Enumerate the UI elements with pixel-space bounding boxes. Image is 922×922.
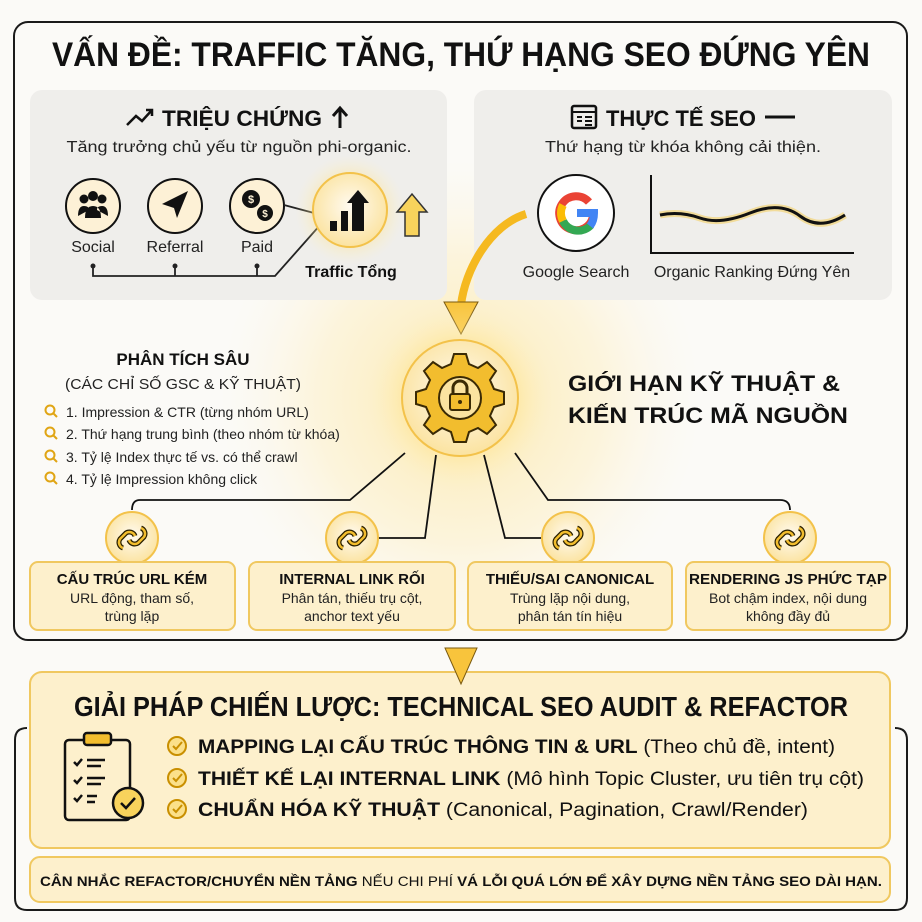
cause boxes: Bot chậm index, nội dung bbox=[709, 590, 867, 606]
icon: social bbox=[66, 179, 120, 233]
cause boxes: trùng lặp bbox=[105, 608, 159, 624]
cause boxes: Phân tán, thiếu trụ cột, bbox=[282, 590, 422, 606]
arrow: up bbox=[397, 194, 427, 236]
cause boxes: anchor text yếu bbox=[304, 608, 400, 624]
icon: paid: $ bbox=[248, 194, 254, 206]
cause icons bbox=[106, 512, 816, 564]
icon: paid: $ bbox=[262, 209, 268, 220]
cause boxes: CẤU TRÚC URL KÉM bbox=[57, 570, 207, 588]
arrow: down to solution bbox=[445, 648, 477, 684]
subtitle: Thứ hạng từ khóa không cải thiện. bbox=[545, 139, 821, 156]
heading: technical limit bbox=[568, 371, 848, 428]
cause boxes: phân tán tín hiệu bbox=[518, 608, 622, 624]
panel: symptoms: Traffic Tổng bbox=[305, 263, 397, 281]
icon: traffic total bbox=[295, 155, 405, 265]
list: solution items bbox=[168, 736, 864, 821]
callout: note: CÂN NHẮC REFACTOR/CHUYỂN NỀN TẢNG NẾU CHI PHÍ VÁ LỖI QUÁ LỚN ĐỂ XÂY DỰNG NỀN TẢNG SEO DÀI HẠN. bbox=[40, 872, 882, 889]
labels: Social bbox=[71, 239, 115, 256]
bottom frame bbox=[15, 728, 907, 910]
icon: paid bbox=[230, 179, 284, 233]
top frame bbox=[14, 22, 907, 640]
icon: clipboard bbox=[65, 733, 143, 820]
chart: flat ranking bbox=[651, 175, 854, 253]
icon: google bbox=[538, 175, 614, 251]
arrow: curved to center bbox=[444, 214, 526, 334]
cause boxes bbox=[30, 562, 890, 630]
list: solution items: THIẾT KẾ LẠI INTERNAL LINK (Mô hình Topic Cluster, ưu tiên trụ cột) bbox=[198, 768, 864, 790]
subtitle: Tăng trưởng chủ yếu từ nguồn phi-organic. bbox=[66, 139, 412, 156]
panel: solution bbox=[30, 672, 890, 848]
panel: symptoms: Paid bbox=[241, 239, 273, 256]
heading: thực tế SEO bbox=[572, 106, 795, 131]
cause boxes: THIẾU/SAI CANONICAL bbox=[486, 571, 654, 588]
text block: deep analysis: (CÁC CHỈ SỐ GSC & KỸ THUẬT) bbox=[65, 375, 301, 393]
background glow bbox=[220, 160, 700, 640]
heading: thực tế SEO: THỰC TẾ SEO bbox=[606, 106, 756, 131]
list: solution items: MAPPING LẠI CẤU TRÚC THÔNG TIN & URL (Theo chủ đề, intent) bbox=[198, 736, 835, 758]
heading: solution: GIẢI PHÁP CHIẾN LƯỢC: TECHNICAL SEO AUDIT & REFACTOR bbox=[74, 690, 848, 722]
heading: technical limit: KIẾN TRÚC MÃ NGUỒN bbox=[568, 403, 848, 428]
text block: deep analysis: 1. Impression & CTR (từng nhóm URL) bbox=[66, 404, 309, 420]
cause boxes: Trùng lặp nội dung, bbox=[510, 590, 630, 606]
heading: technical limit: GIỚI HẠN KỸ THUẬT & bbox=[568, 371, 840, 396]
callout: note bbox=[30, 857, 890, 902]
heading: triệu chứng: TRIỆU CHỨNG bbox=[162, 106, 322, 131]
text block: deep analysis: 3. Tỷ lệ Index thực tế vs. có thể crawl bbox=[66, 449, 298, 465]
panel: SEO reality bbox=[474, 90, 892, 300]
title: VẤN ĐỀ: TRAFFIC TĂNG, THỨ HẠNG SEO ĐỨNG YÊN bbox=[52, 36, 870, 74]
cause boxes: RENDERING JS PHỨC TẠP bbox=[689, 570, 887, 588]
connectors gear to causes bbox=[132, 453, 790, 538]
connector bracket bbox=[93, 205, 321, 276]
panel: SEO reality: Google Search bbox=[523, 264, 629, 281]
icon: referral bbox=[148, 179, 202, 233]
text block: deep analysis: PHÂN TÍCH SÂU bbox=[116, 350, 250, 369]
text block: deep analysis bbox=[46, 350, 340, 487]
panel: symptoms bbox=[30, 90, 447, 300]
cause boxes: URL động, tham số, bbox=[70, 590, 194, 606]
text block: deep analysis: 4. Tỷ lệ Impression không click bbox=[66, 471, 258, 487]
text block: deep analysis: 2. Thứ hạng trung bình (theo nhóm từ khóa) bbox=[66, 426, 340, 442]
panel: symptoms: Referral bbox=[147, 239, 203, 256]
list: solution items: CHUẨN HÓA KỸ THUẬT (Canonical, Pagination, Crawl/Render) bbox=[198, 799, 808, 821]
cause boxes: INTERNAL LINK RỐI bbox=[279, 570, 425, 588]
cause boxes: không đầy đủ bbox=[746, 608, 830, 624]
icon: gear lock center bbox=[365, 303, 555, 493]
panel: SEO reality: Organic Ranking Đứng Yên bbox=[654, 264, 850, 281]
